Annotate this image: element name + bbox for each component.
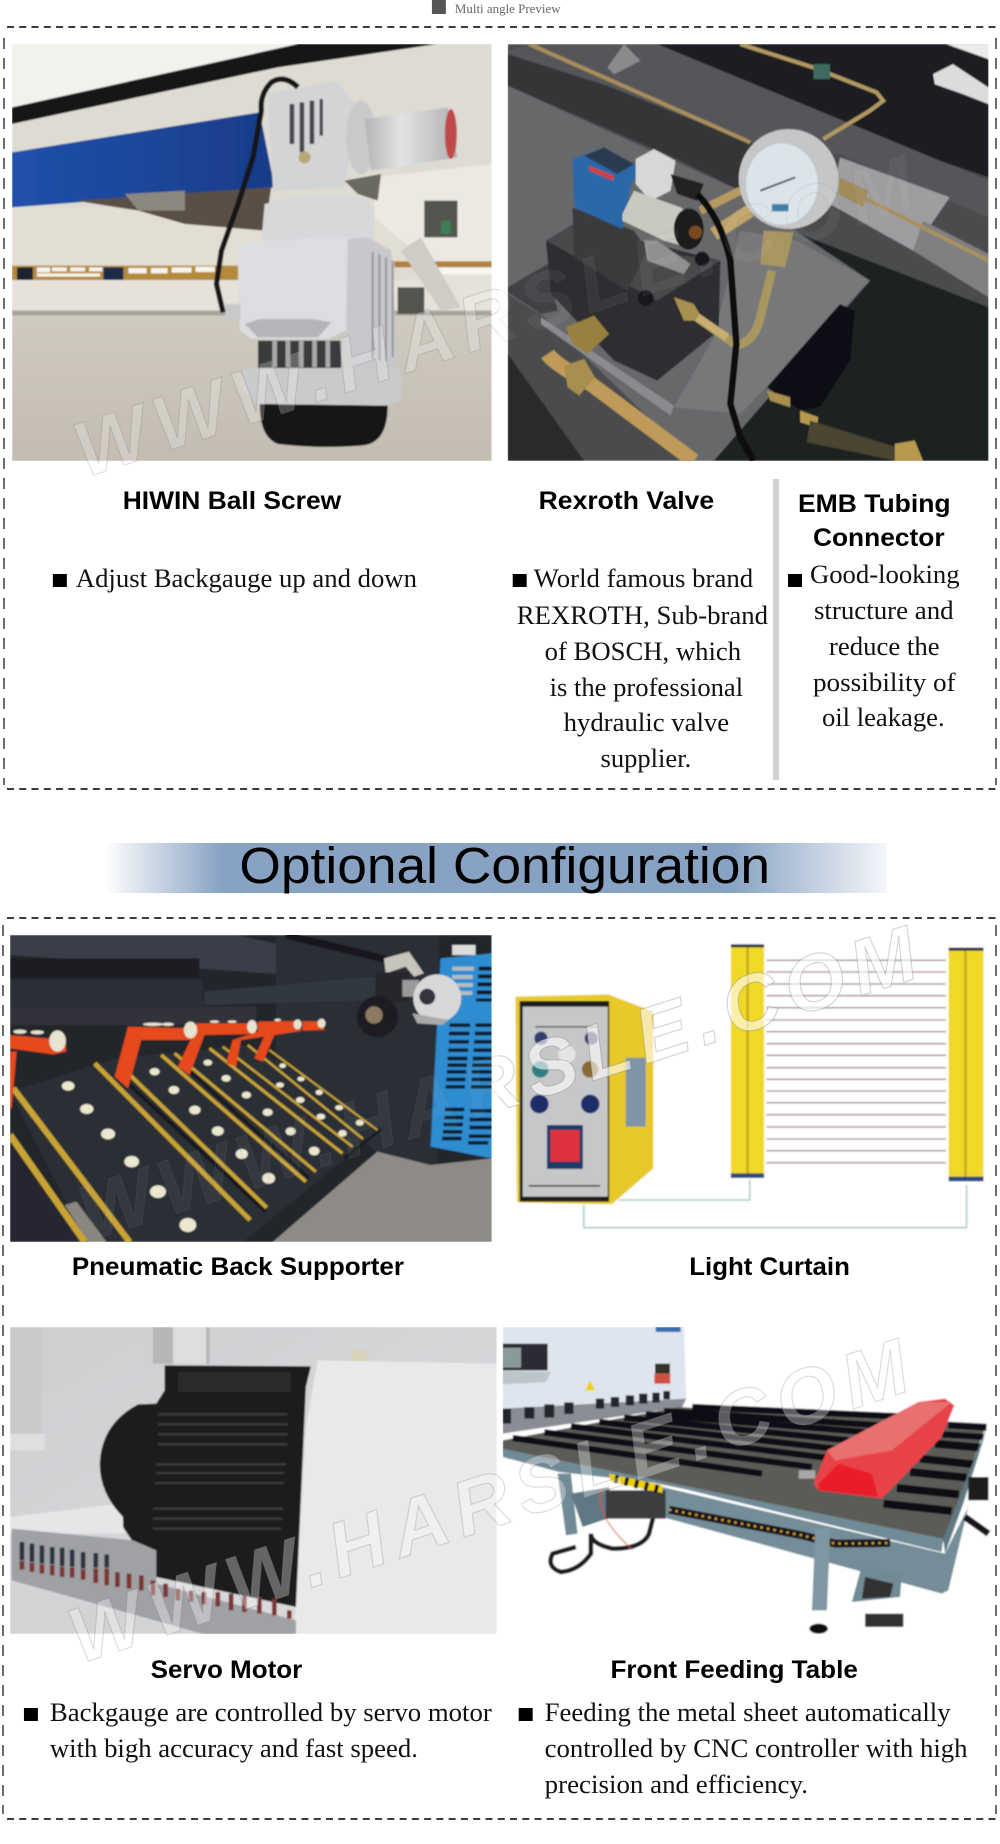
text block: HIWIN description: Adjust Backgauge up and down bbox=[76, 564, 417, 593]
text block: Rexroth description: REXROTH, Sub-brand bbox=[517, 601, 768, 630]
photo: servo motor bbox=[10, 1327, 497, 1634]
text block: Rexroth description bbox=[513, 564, 768, 773]
watermark over the top photos: WWW.HARSLE.COM bbox=[63, 138, 927, 494]
text block: EMB description: structure and bbox=[814, 596, 954, 625]
heading: Light Curtain: Light Curtain bbox=[689, 1253, 850, 1281]
photo: pneumatic back supporter bbox=[10, 935, 492, 1242]
watermark over the top photos: WWW.HARSLE.COM bbox=[63, 138, 927, 494]
heading: HIWIN Ball Screw: HIWIN Ball Screw bbox=[123, 487, 342, 515]
banner: Optional Configuration: Optional Configuration bbox=[239, 837, 770, 894]
text block: EMB description bbox=[788, 560, 960, 732]
section header: Multi angle Preview: Multi angle Preview bbox=[455, 1, 561, 16]
text block: servo motor description: Backgauge are controlled by servo motor bbox=[50, 1698, 492, 1727]
banner: Optional Configuration bbox=[105, 837, 887, 894]
text block: front feeding table description: precision and efficiency. bbox=[545, 1770, 808, 1799]
watermark over the servo motor row: WWW.HARSLE.COM bbox=[58, 1321, 921, 1680]
heading: Servo Motor: Servo Motor bbox=[151, 1656, 303, 1684]
photo: front feeding table bbox=[502, 1327, 991, 1634]
text block: Rexroth description: of BOSCH, which bbox=[545, 637, 741, 666]
text block: EMB description: possibility of bbox=[813, 668, 956, 697]
text block: servo motor description bbox=[24, 1698, 492, 1763]
text block: Rexroth description: supplier. bbox=[600, 744, 691, 773]
text block: Rexroth description: hydraulic valve bbox=[564, 708, 729, 737]
watermark over the light curtain row: WWW.HARSLE.COM bbox=[68, 908, 929, 1257]
watermark over the light curtain row: WWW.HARSLE.COM bbox=[68, 908, 929, 1257]
photo: worm gear backgauge motor bbox=[12, 44, 492, 461]
heading: Front Feeding Table: Front Feeding Table bbox=[610, 1656, 858, 1684]
text block: Rexroth description: is the professional bbox=[550, 673, 743, 702]
heading: EMB Tubing Connector bbox=[798, 490, 951, 552]
text block: front feeding table description: Feeding the metal sheet automatically bbox=[545, 1698, 951, 1727]
photo: Rexroth valve and pressure gauge bbox=[508, 44, 988, 461]
heading: EMB Tubing Connector: EMB Tubing bbox=[798, 490, 951, 518]
text block: Rexroth description: World famous brand bbox=[534, 564, 753, 593]
photo: light curtain with control box bbox=[514, 943, 984, 1230]
text block: front feeding table description bbox=[519, 1698, 968, 1799]
heading: Rexroth Valve: Rexroth Valve bbox=[539, 487, 714, 515]
text block: EMB description: oil leakage. bbox=[822, 703, 945, 732]
text block: front feeding table description: controlled by CNC controller with high bbox=[545, 1734, 968, 1763]
heading: EMB Tubing Connector: Connector bbox=[813, 524, 945, 552]
heading: Pneumatic Back Supporter: Pneumatic Back Supporter bbox=[72, 1253, 404, 1281]
text block: EMB description: reduce the bbox=[829, 632, 940, 661]
text block: servo motor description: with bigh accuracy and fast speed. bbox=[50, 1734, 418, 1763]
text block: EMB description: Good-looking bbox=[810, 560, 960, 589]
